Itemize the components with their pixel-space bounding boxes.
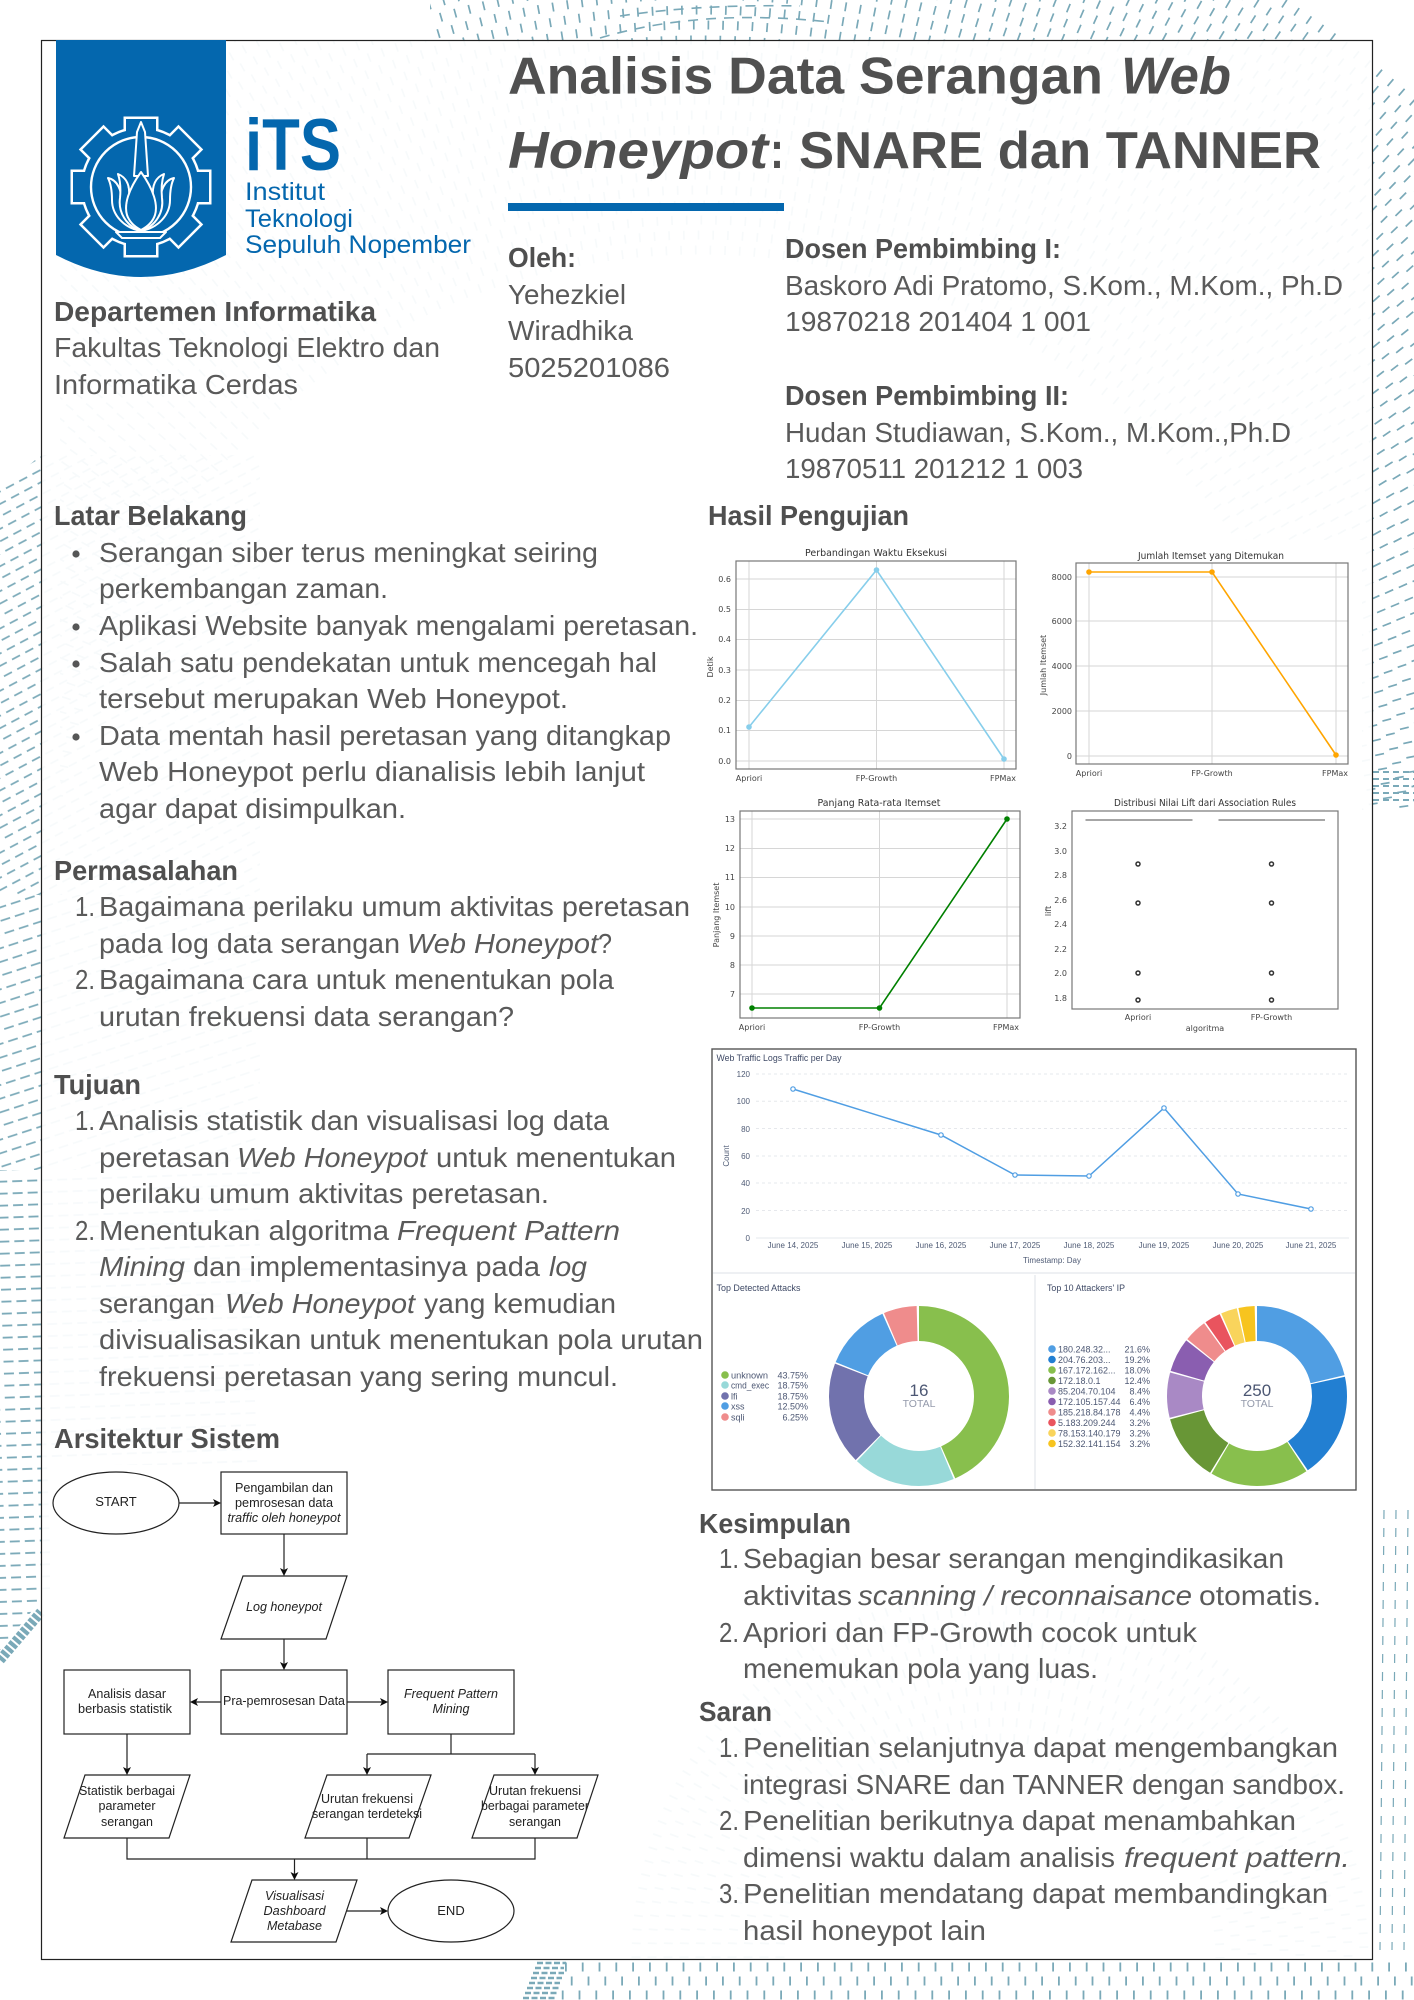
icon: ITS shield: [56, 40, 226, 277]
line chart: Web Traffic Logs Traffic per Day: Timestamp: Day: [1023, 1256, 1081, 1265]
numbered list: Apriori dan FP-Growth cocok untuk: [743, 1617, 1198, 1648]
legend: [721, 1370, 808, 1422]
box plot: Distribusi Nilai Lift: [1044, 798, 1338, 1033]
line chart: Perbandingan Waktu Eksekusi: 0.5: [718, 605, 731, 614]
flowchart labels: END: [437, 1903, 465, 1918]
author block: [508, 242, 670, 383]
legend: 172.18.0.1: [1058, 1376, 1101, 1386]
author block: Wiradhika: [508, 315, 633, 346]
heading: Arsitektur Sistem: [54, 1423, 280, 1454]
donut chart: Top 10 Attackers' IP: TOTAL: [1241, 1398, 1274, 1410]
bullet list: agar dapat disimpulkan.: [99, 793, 406, 824]
legend: sqli: [731, 1412, 745, 1422]
parameter sequence output node: [472, 1775, 598, 1838]
line chart: Web Traffic Logs Traffic per Day: 60: [741, 1152, 751, 1161]
legend: 180.248.32...: [1058, 1344, 1111, 1354]
numbered list: pada log data serangan: [99, 928, 400, 959]
line chart: Perbandingan Waktu Eksekusi: 0.3: [718, 666, 731, 675]
donut chart: Top 10 Attackers' IP: [1047, 1283, 1330, 1468]
department block: [54, 296, 440, 400]
department block: Departemen Informatika: [54, 296, 376, 327]
numbered list: aktivitas: [743, 1580, 852, 1611]
line chart: Panjang Rata-rata Itemset: 10: [725, 903, 735, 912]
numbered list: 2.: [75, 1215, 95, 1246]
flowchart labels: Dashboard: [264, 1903, 326, 1918]
line chart: Perbandingan Waktu Eksekusi: FPMax: [990, 774, 1016, 783]
numbered list: otomatis.: [1199, 1580, 1321, 1611]
numbered list: dimensi waktu dalam analisis: [743, 1842, 1115, 1873]
line chart: Panjang Rata-rata Itemset: 9: [730, 932, 735, 941]
flowchart labels: Urutan frekuensi: [321, 1791, 413, 1806]
START node: [53, 1472, 179, 1534]
flowchart labels: serangan: [101, 1814, 153, 1829]
flowchart connectors: [127, 1503, 535, 1911]
legend: unknown: [731, 1370, 768, 1380]
department block: Fakultas Teknologi Elektro dan: [54, 332, 440, 363]
icon: gear emblem: [73, 119, 209, 255]
dashboard panel: [712, 1049, 1356, 1490]
line chart: Perbandingan Waktu Eksekusi: Perbandingan Waktu Eksekusi: [805, 548, 947, 559]
numbered list: Penelitian mendatang dapat membandingkan: [743, 1878, 1328, 1909]
flowchart labels: parameter: [98, 1798, 156, 1813]
title underline: [508, 203, 784, 211]
flowchart labels: Log honeypot: [246, 1599, 323, 1614]
line chart: Web Traffic Logs Traffic per Day: 100: [737, 1097, 751, 1106]
line chart: Web Traffic Logs Traffic per Day: June 16, 2025: [916, 1241, 967, 1250]
supervisor I: Dosen Pembimbing I:: [785, 233, 1061, 264]
title: SNARE dan TANNER: [799, 122, 1321, 180]
detected sequence output node: [305, 1775, 431, 1838]
department block: Informatika Cerdas: [54, 369, 298, 400]
line chart: Jumlah Itemset yang Ditemukan: Jumlah Itemset: [1039, 635, 1048, 696]
ITS wordmark: iTS: [245, 105, 341, 186]
line chart: Web Traffic Logs Traffic per Day: June 19, 2025: [1139, 1241, 1190, 1250]
line chart: Panjang Rata-rata Itemset: FP-Growth: [859, 1023, 900, 1032]
legend: 8.4%: [1129, 1386, 1150, 1396]
numbered list: Web Honeypot: [225, 1288, 416, 1319]
box plot: Distribusi Nilai Lift: FP-Growth: [1251, 1013, 1292, 1022]
legend: 6.4%: [1129, 1397, 1150, 1407]
line chart: Jumlah Itemset yang Ditemukan: 4000: [1052, 662, 1072, 671]
line chart: Jumlah Itemset yang Ditemukan: 6000: [1052, 617, 1072, 626]
legend: 6.25%: [782, 1412, 808, 1422]
numbered list: dan implementasinya pada: [193, 1251, 540, 1282]
supervisor I: Baskoro Adi Pratomo, S.Kom., M.Kom., Ph.D: [785, 270, 1343, 301]
flowchart labels: traffic oleh honeypot: [228, 1510, 342, 1525]
box plot: Distribusi Nilai Lift: 3.2: [1054, 822, 1067, 831]
line chart: Jumlah Itemset yang Ditemukan: 8000: [1052, 573, 1072, 582]
donut chart: Top Detected Attacks: Top Detected Attacks: [716, 1283, 801, 1294]
legend: xss: [731, 1402, 745, 1412]
supervisor II: Dosen Pembimbing II:: [785, 380, 1069, 411]
section: Latar Belakang: [54, 500, 698, 824]
legend: 78.153.140.179: [1058, 1428, 1121, 1438]
numbered list: Frequent Pattern: [397, 1215, 620, 1246]
numbered list: hasil honeypot lain: [743, 1915, 986, 1946]
numbered list: 3.: [719, 1878, 739, 1909]
donut chart: Top Detected Attacks: 16: [910, 1381, 928, 1400]
author block: 5025201086: [508, 352, 670, 383]
supervisor II: Hudan Studiawan, S.Kom., M.Kom.,Ph.D: [785, 417, 1291, 448]
author block: Oleh:: [508, 242, 576, 273]
supervisor II: 19870511 201212 1 003: [785, 453, 1083, 484]
legend: 85.204.70.104: [1058, 1386, 1116, 1396]
line chart: Web Traffic Logs Traffic per Day: June 21, 2025: [1286, 1241, 1337, 1250]
heading: Tujuan: [54, 1069, 141, 1100]
numbered list: 1.: [719, 1732, 739, 1763]
flowchart labels: Frequent Pattern: [404, 1686, 498, 1701]
flowchart labels: Visualisasi: [265, 1888, 325, 1903]
line chart: Web Traffic Logs Traffic per Day: 20: [741, 1207, 751, 1216]
numbered list: menemukan pola yang luas.: [743, 1653, 1098, 1684]
supervisor II: [785, 380, 1291, 484]
title: Analisis Data Serangan: [508, 48, 1103, 106]
section: Tujuan: [54, 1069, 703, 1392]
legend: 21.6%: [1124, 1344, 1150, 1354]
line chart: Perbandingan Waktu Eksekusi: 0.0: [718, 757, 731, 766]
numbered list: [719, 1543, 1321, 1684]
dashboard node: [231, 1880, 357, 1942]
heading: Saran: [699, 1696, 772, 1727]
numbered list: frekuensi peretasan yang sering muncul.: [99, 1361, 618, 1392]
END node: [388, 1880, 514, 1942]
box plot: Distribusi Nilai Lift: Distribusi Nilai Lift dari Association Rules: [1114, 798, 1296, 809]
title: [508, 48, 1321, 180]
line chart: Panjang Rata-rata Itemset: Apriori: [739, 1023, 765, 1032]
flowchart labels: Pra-pemrosesan Data: [223, 1693, 346, 1708]
numbered list: Analisis statistik dan visualisasi log data: [99, 1105, 609, 1136]
box plot: Distribusi Nilai Lift: algoritma: [1186, 1024, 1224, 1033]
numbered list: [75, 1105, 703, 1392]
line chart: Perbandingan Waktu Eksekusi: Detik: [706, 656, 715, 678]
line chart: Panjang Rata-rata Itemset: 11: [725, 873, 735, 882]
bullet list: tersebut merupakan Web Honeypot.: [99, 683, 568, 714]
flowchart labels: serangan terdeteksi: [312, 1806, 422, 1821]
box plot: Distribusi Nilai Lift: 2.2: [1054, 945, 1067, 954]
heading: Latar Belakang: [54, 500, 247, 531]
line chart: Panjang Rata-rata Itemset: [712, 798, 1020, 1032]
section: Permasalahan: [54, 855, 690, 1032]
numbered list: 1.: [75, 891, 95, 922]
line chart: Perbandingan Waktu Eksekusi: [706, 548, 1016, 783]
bullet list: [72, 537, 698, 824]
flowchart labels: pemrosesan data: [235, 1495, 334, 1510]
numbered list: frequent pattern.: [1124, 1842, 1350, 1873]
legend: lfi: [731, 1392, 738, 1402]
legend: [1048, 1344, 1150, 1449]
numbered list: log: [549, 1251, 587, 1282]
donut chart: Top Detected Attacks: [716, 1283, 992, 1468]
line chart: Perbandingan Waktu Eksekusi: FP-Growth: [856, 774, 897, 783]
heading: Kesimpulan: [699, 1508, 851, 1539]
numbered list: untuk menentukan: [436, 1142, 676, 1173]
flowchart labels: Mining: [432, 1701, 470, 1716]
numbered list: divisualisasikan untuk menentukan pola urutan: [99, 1324, 703, 1355]
donut chart: Top 10 Attackers' IP: 250: [1243, 1381, 1271, 1400]
line chart: Panjang Rata-rata Itemset: 8: [730, 961, 735, 970]
frequent pattern node: [388, 1670, 514, 1734]
box plot: Distribusi Nilai Lift: 1.8: [1054, 994, 1067, 1003]
numbered list: perilaku umum aktivitas peretasan.: [99, 1178, 549, 1209]
section: Kesimpulan: [699, 1508, 1321, 1684]
line chart: Panjang Rata-rata Itemset: 13: [725, 815, 735, 824]
donut chart: Top Detected Attacks: TOTAL: [903, 1398, 936, 1410]
numbered list: integrasi SNARE dan TANNER dengan sandbox.: [743, 1769, 1345, 1800]
line chart: Web Traffic Logs Traffic per Day: 40: [741, 1179, 751, 1188]
legend: 12.50%: [777, 1402, 808, 1412]
numbered list: ?: [598, 928, 612, 959]
legend: 3.2%: [1129, 1439, 1150, 1449]
legend: 5.183.209.244: [1058, 1418, 1116, 1428]
title: :: [770, 122, 784, 180]
legend: 12.4%: [1124, 1376, 1150, 1386]
legend: 3.2%: [1129, 1418, 1150, 1428]
box plot: Distribusi Nilai Lift: lift: [1044, 906, 1053, 916]
supervisor I: 19870218 201404 1 001: [785, 306, 1091, 337]
line chart: Panjang Rata-rata Itemset: FPMax: [993, 1023, 1019, 1032]
numbered list: [719, 1732, 1350, 1946]
numbered list: Penelitian selanjutnya dapat mengembangkan: [743, 1732, 1338, 1763]
bullet list: perkembangan zaman.: [99, 573, 388, 604]
legend: 204.76.203...: [1058, 1355, 1111, 1365]
line chart: Jumlah Itemset yang Ditemukan: Apriori: [1076, 769, 1102, 778]
numbered list: Penelitian berikutnya dapat menambahkan: [743, 1805, 1296, 1836]
legend: 43.75%: [777, 1370, 808, 1380]
bullet list: Data mentah hasil peretasan yang ditangkap: [99, 720, 671, 751]
numbered list: 2.: [719, 1805, 739, 1836]
flowchart labels: Pengambilan dan: [235, 1480, 333, 1495]
flowchart labels: berbagai parameter: [481, 1798, 590, 1813]
numbered list: serangan: [99, 1288, 215, 1319]
bullet list: Aplikasi Website banyak mengalami peretasan.: [99, 610, 698, 641]
section heading: Hasil Pengujian: Hasil Pengujian: [708, 500, 909, 531]
preprocessing node: [221, 1670, 347, 1734]
line chart: Web Traffic Logs Traffic per Day: 120: [737, 1070, 751, 1079]
donut chart: Top 10 Attackers' IP: Top 10 Attackers' IP: [1047, 1283, 1125, 1294]
line chart: Perbandingan Waktu Eksekusi: Apriori: [736, 774, 762, 783]
author block: Yehezkiel: [508, 279, 626, 310]
line chart: Panjang Rata-rata Itemset: Panjang Rata-rata Itemset: [818, 798, 941, 809]
flowchart labels: START: [95, 1494, 137, 1509]
line chart: Jumlah Itemset yang Ditemukan: [1039, 551, 1348, 778]
log honeypot node: [221, 1576, 347, 1639]
legend: 18.75%: [777, 1392, 808, 1402]
line chart: Web Traffic Logs Traffic per Day: [716, 1053, 1349, 1265]
numbered list: Bagaimana perilaku umum aktivitas peretasan: [99, 891, 690, 922]
line chart: Panjang Rata-rata Itemset: Panjang Itemset: [712, 883, 721, 947]
ITS wordmark: Sepuluh Nopember: [245, 231, 471, 259]
box plot: Distribusi Nilai Lift: Apriori: [1125, 1013, 1151, 1022]
flowchart arrowheads: [123, 1499, 539, 1915]
legend: 172.105.157.44: [1058, 1397, 1121, 1407]
flowchart labels: Analisis dasar: [88, 1686, 167, 1701]
box plot: Distribusi Nilai Lift: 2.4: [1054, 920, 1067, 929]
line chart: Panjang Rata-rata Itemset: 12: [725, 844, 735, 853]
numbered list: 2.: [719, 1617, 739, 1648]
box plot: Distribusi Nilai Lift: 2.0: [1054, 969, 1067, 978]
legend: 3.2%: [1129, 1428, 1150, 1438]
flowchart labels: [78, 1480, 590, 1933]
legend: cmd_exec: [731, 1380, 769, 1390]
numbered list: 2.: [75, 964, 95, 995]
line chart: Jumlah Itemset yang Ditemukan: 0: [1067, 752, 1072, 761]
numbered list: peretasan: [99, 1142, 230, 1173]
line chart: Jumlah Itemset yang Ditemukan: FPMax: [1322, 769, 1348, 778]
line chart: Web Traffic Logs Traffic per Day: Web Traffic Logs Traffic per Day: [716, 1053, 842, 1064]
section: Saran: [699, 1696, 1350, 1946]
line chart: Perbandingan Waktu Eksekusi: 0.4: [718, 635, 731, 644]
numbered list: Web Honeypot: [237, 1142, 428, 1173]
line chart: Perbandingan Waktu Eksekusi: 0.1: [718, 726, 731, 735]
flowchart labels: serangan: [509, 1814, 561, 1829]
charts backdrop: [702, 540, 1362, 1036]
box plot: Distribusi Nilai Lift: 2.6: [1054, 896, 1067, 905]
line chart: Panjang Rata-rata Itemset: 7: [730, 990, 735, 999]
numbered list: Menentukan algoritma: [99, 1215, 389, 1246]
section: Arsitektur Sistem: [50, 1423, 602, 1949]
numbered list: Mining: [99, 1251, 185, 1282]
statistical analysis node: [64, 1670, 190, 1734]
flowchart labels: berbasis statistik: [78, 1701, 172, 1716]
bullet list: Web Honeypot perlu dianalisis lebih lanjut: [99, 756, 645, 787]
legend: 18.0%: [1124, 1366, 1150, 1376]
line chart: Web Traffic Logs Traffic per Day: June 20, 2025: [1213, 1241, 1264, 1250]
flowchart labels: Urutan frekuensi: [489, 1783, 581, 1798]
ITS logo: [56, 40, 471, 277]
numbered list: 1.: [719, 1543, 739, 1574]
box plot: Distribusi Nilai Lift: 3.0: [1054, 847, 1067, 856]
legend: 167.172.162...: [1058, 1366, 1116, 1376]
flowchart labels: Statistik berbagai: [79, 1783, 175, 1798]
line chart: Jumlah Itemset yang Ditemukan: Jumlah Itemset yang Ditemukan: [1137, 551, 1284, 562]
numbered list: Sebagian besar serangan mengindikasikan: [743, 1543, 1284, 1574]
ITS wordmark: Institut: [245, 178, 325, 206]
flowchart: [50, 1465, 602, 1949]
numbered list: urutan frekuensi data serangan?: [99, 1001, 514, 1032]
legend: 185.218.84.178: [1058, 1408, 1121, 1418]
line chart: Jumlah Itemset yang Ditemukan: 2000: [1052, 707, 1072, 716]
bullet list: Serangan siber terus meningkat seiring: [99, 537, 598, 568]
heading: Permasalahan: [54, 855, 238, 886]
numbered list: scanning / reconnaisance: [858, 1580, 1192, 1611]
line chart: Jumlah Itemset yang Ditemukan: FP-Growth: [1191, 769, 1233, 778]
line chart: Web Traffic Logs Traffic per Day: June 14, 2025: [768, 1241, 819, 1250]
supervisor I: [785, 233, 1343, 337]
line chart: Web Traffic Logs Traffic per Day: June 15, 2025: [842, 1241, 893, 1250]
legend: 4.4%: [1129, 1408, 1150, 1418]
line chart: Web Traffic Logs Traffic per Day: 80: [741, 1125, 751, 1134]
legend: 152.32.141.154: [1058, 1439, 1121, 1449]
legend: 18.75%: [777, 1380, 808, 1390]
line chart: Web Traffic Logs Traffic per Day: 0: [746, 1234, 751, 1243]
line chart: Web Traffic Logs Traffic per Day: June 18, 2025: [1064, 1241, 1115, 1250]
title: Web: [1121, 48, 1231, 106]
legend: 19.2%: [1124, 1355, 1150, 1365]
line chart: Web Traffic Logs Traffic per Day: June 17, 2025: [990, 1241, 1041, 1250]
line chart: Perbandingan Waktu Eksekusi: 0.6: [718, 575, 731, 584]
title: Honeypot: [508, 122, 771, 180]
data collection node: [221, 1472, 347, 1534]
numbered list: yang kemudian: [424, 1288, 616, 1319]
statistics output node: [64, 1775, 190, 1838]
numbered list: Bagaimana cara untuk menentukan pola: [99, 964, 614, 995]
numbered list: Web Honeypot: [407, 928, 599, 959]
numbered list: [75, 891, 690, 1032]
box plot: Distribusi Nilai Lift: 2.8: [1054, 871, 1067, 880]
line chart: Web Traffic Logs Traffic per Day: Count: [722, 1145, 731, 1167]
ITS wordmark: [245, 105, 471, 259]
flowchart labels: Metabase: [267, 1918, 322, 1933]
numbered list: 1.: [75, 1105, 95, 1136]
line chart: Perbandingan Waktu Eksekusi: 0.2: [718, 696, 731, 705]
bullet list: Salah satu pendekatan untuk mencegah hal: [99, 647, 657, 678]
ITS wordmark: Teknologi: [245, 205, 353, 233]
